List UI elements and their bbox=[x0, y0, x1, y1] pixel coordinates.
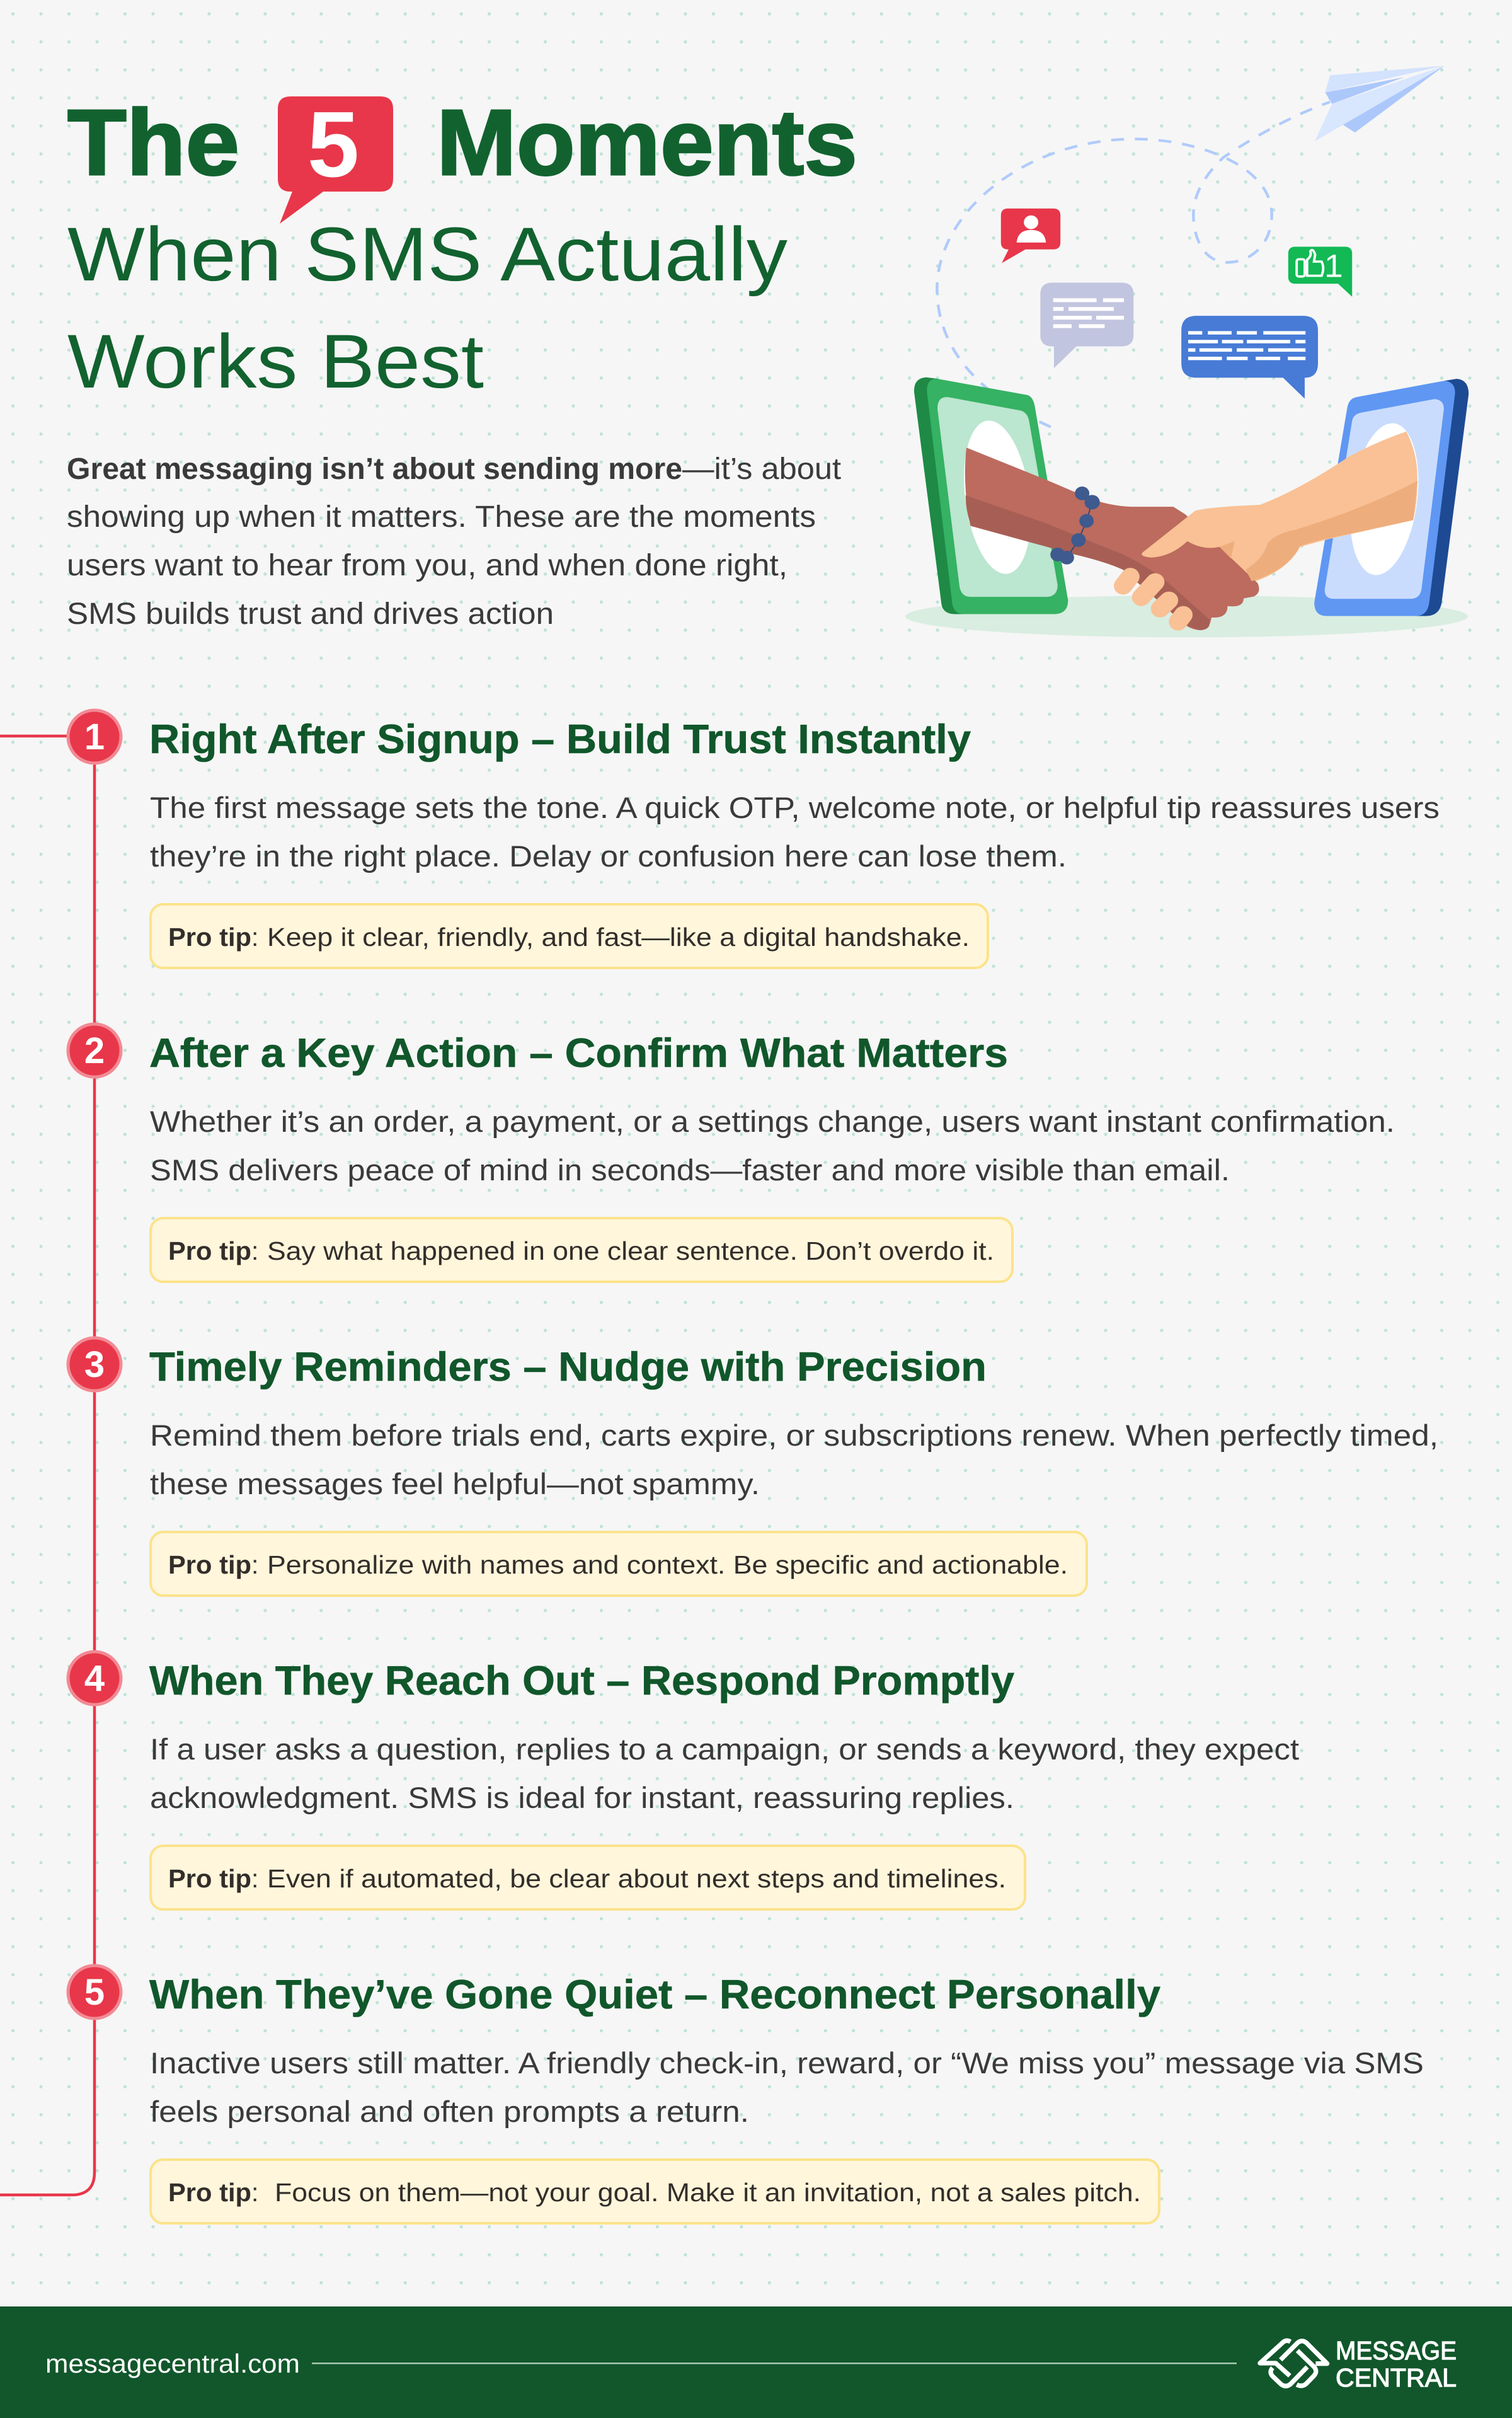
pro tip 2: Say what happened in one clear sentence. Don’t overdo it. bbox=[267, 1236, 994, 1265]
pro tip 3: : bbox=[251, 1550, 258, 1579]
pro tip 3: Personalize with names and context. Be specific and actionable. bbox=[267, 1550, 1068, 1579]
pro tip 5: Focus on them—not your goal. Make it an invitation, not a sales pitch. bbox=[275, 2178, 1141, 2207]
number badge 3: 3 bbox=[84, 1344, 105, 1385]
blue phone bbox=[1314, 379, 1469, 616]
number badge 2: 2 bbox=[84, 1030, 105, 1071]
number badge 5: 5 bbox=[84, 1972, 105, 2013]
icon: red speech bubble with number 5 bbox=[278, 93, 393, 224]
title: When SMS Actually bbox=[67, 211, 788, 297]
intro text: —it’s about bbox=[682, 452, 841, 486]
body 4 bbox=[150, 1733, 1299, 1815]
body 3: these messages feel helpful—not spammy. bbox=[150, 1468, 760, 1501]
bracelet bbox=[1050, 486, 1100, 565]
intro text: SMS builds trust and drives action bbox=[67, 597, 554, 631]
heading 1: Right After Signup – Build Trust Instantly bbox=[149, 716, 971, 762]
body 5: feels personal and often prompts a return. bbox=[150, 2095, 749, 2129]
moment 5 bbox=[68, 1966, 1424, 2223]
pro tip 1: Keep it clear, friendly, and fast—like a digital handshake. bbox=[267, 923, 970, 952]
heading 2: After a Key Action – Confirm What Matters bbox=[149, 1030, 1008, 1076]
moment 2 bbox=[68, 1024, 1395, 1282]
pro tip 1: Pro tip bbox=[168, 923, 251, 952]
body 4: If a user asks a question, replies to a campaign, or sends a keyword, they expect bbox=[150, 1733, 1299, 1766]
body 2 bbox=[150, 1105, 1395, 1187]
heading 3: Timely Reminders – Nudge with Precision bbox=[149, 1344, 987, 1390]
logo: Message Central bbox=[1260, 2336, 1457, 2392]
icon: green thumbs-up bubble bbox=[1288, 246, 1352, 297]
fingers bbox=[1123, 577, 1183, 622]
icon: red speech bubble with number 5: 5 bbox=[307, 93, 359, 197]
number badge 4: 4 bbox=[84, 1658, 105, 1699]
pro tip 3: Pro tip bbox=[168, 1550, 251, 1579]
brown arm and hand bbox=[965, 447, 1259, 630]
pro tip 2 bbox=[151, 1218, 1012, 1282]
icon: paper plane bbox=[1315, 66, 1445, 141]
body 1: The first message sets the tone. A quick OTP, welcome note, or helpful tip reassures users bbox=[150, 792, 1440, 825]
number badge 1: 1 bbox=[84, 717, 105, 757]
body 5 bbox=[150, 2047, 1424, 2129]
dashed flight path bbox=[937, 102, 1330, 427]
intro text bbox=[67, 452, 841, 631]
moment 4 bbox=[68, 1652, 1299, 1909]
pro tip 2: Pro tip bbox=[168, 1236, 251, 1265]
logo: Message Central: CENTRAL bbox=[1336, 2363, 1457, 2392]
body 3: Remind them before trials end, carts expire, or subscriptions renew. When perfectly timed, bbox=[150, 1419, 1438, 1453]
icon: grey chat bubble bbox=[1040, 282, 1133, 368]
moment 1 bbox=[68, 710, 1440, 968]
pro tip 5: : bbox=[251, 2178, 258, 2207]
pro tip 5 bbox=[151, 2160, 1159, 2223]
website url: messagecentral.com bbox=[45, 2349, 300, 2378]
body 3 bbox=[150, 1419, 1438, 1501]
title: The bbox=[67, 91, 239, 195]
pro tip 2: : bbox=[251, 1236, 258, 1265]
peach arm and hand bbox=[1142, 432, 1418, 581]
pro tip 4: : bbox=[251, 1864, 258, 1893]
illustration: handshake between two phones bbox=[905, 66, 1469, 637]
footer bbox=[0, 2306, 1512, 2418]
pro tip 4 bbox=[151, 1846, 1025, 1909]
body 2: SMS delivers peace of mind in seconds—faster and more visible than email. bbox=[150, 1154, 1230, 1187]
intro text: Great messaging isn’t about sending more bbox=[67, 452, 682, 486]
heading 5: When They’ve Gone Quiet – Reconnect Personally bbox=[149, 1971, 1160, 2017]
title: Works Best bbox=[67, 318, 484, 404]
timeline connector bbox=[0, 736, 94, 2195]
pro tip 1: : bbox=[251, 923, 258, 952]
icon: blue chat bubble bbox=[1181, 316, 1318, 399]
ground shadow bbox=[905, 596, 1468, 637]
number badge 1 bbox=[68, 710, 121, 763]
number badge 2 bbox=[68, 1024, 121, 1077]
body 2: Whether it’s an order, a payment, or a settings change, users want instant confirmation. bbox=[150, 1105, 1395, 1139]
body 4: acknowledgment. SMS is ideal for instant, reassuring replies. bbox=[150, 1782, 1014, 1815]
pro tip 1 bbox=[151, 904, 988, 968]
title bbox=[67, 91, 857, 404]
pro tip 5: Pro tip bbox=[168, 2178, 251, 2207]
number badge 5 bbox=[68, 1966, 121, 2018]
heading 4: When They Reach Out – Respond Promptly bbox=[149, 1657, 1014, 1703]
logo: Message Central: MESSAGE bbox=[1336, 2336, 1457, 2365]
number badge 4 bbox=[68, 1652, 121, 1705]
moment 3 bbox=[68, 1338, 1438, 1596]
pro tip 4: Even if automated, be clear about next steps and timelines. bbox=[267, 1864, 1006, 1893]
pro tip 4: Pro tip bbox=[168, 1864, 251, 1893]
icon: green thumbs-up bubble: 1 bbox=[1324, 249, 1343, 284]
icon: red contact bubble bbox=[1001, 209, 1060, 263]
body 5: Inactive users still matter. A friendly check-in, reward, or “We miss you” message via SMS bbox=[150, 2047, 1424, 2080]
body 1 bbox=[150, 792, 1440, 873]
green phone bbox=[914, 377, 1068, 614]
number badge 3 bbox=[68, 1338, 121, 1391]
intro text: users want to hear from you, and when done right, bbox=[67, 549, 788, 582]
title: Moments bbox=[437, 91, 857, 195]
body 1: they’re in the right place. Delay or confusion here can lose them. bbox=[150, 840, 1067, 873]
intro text: showing up when it matters. These are the moments bbox=[67, 500, 816, 534]
pro tip 3 bbox=[151, 1532, 1087, 1596]
